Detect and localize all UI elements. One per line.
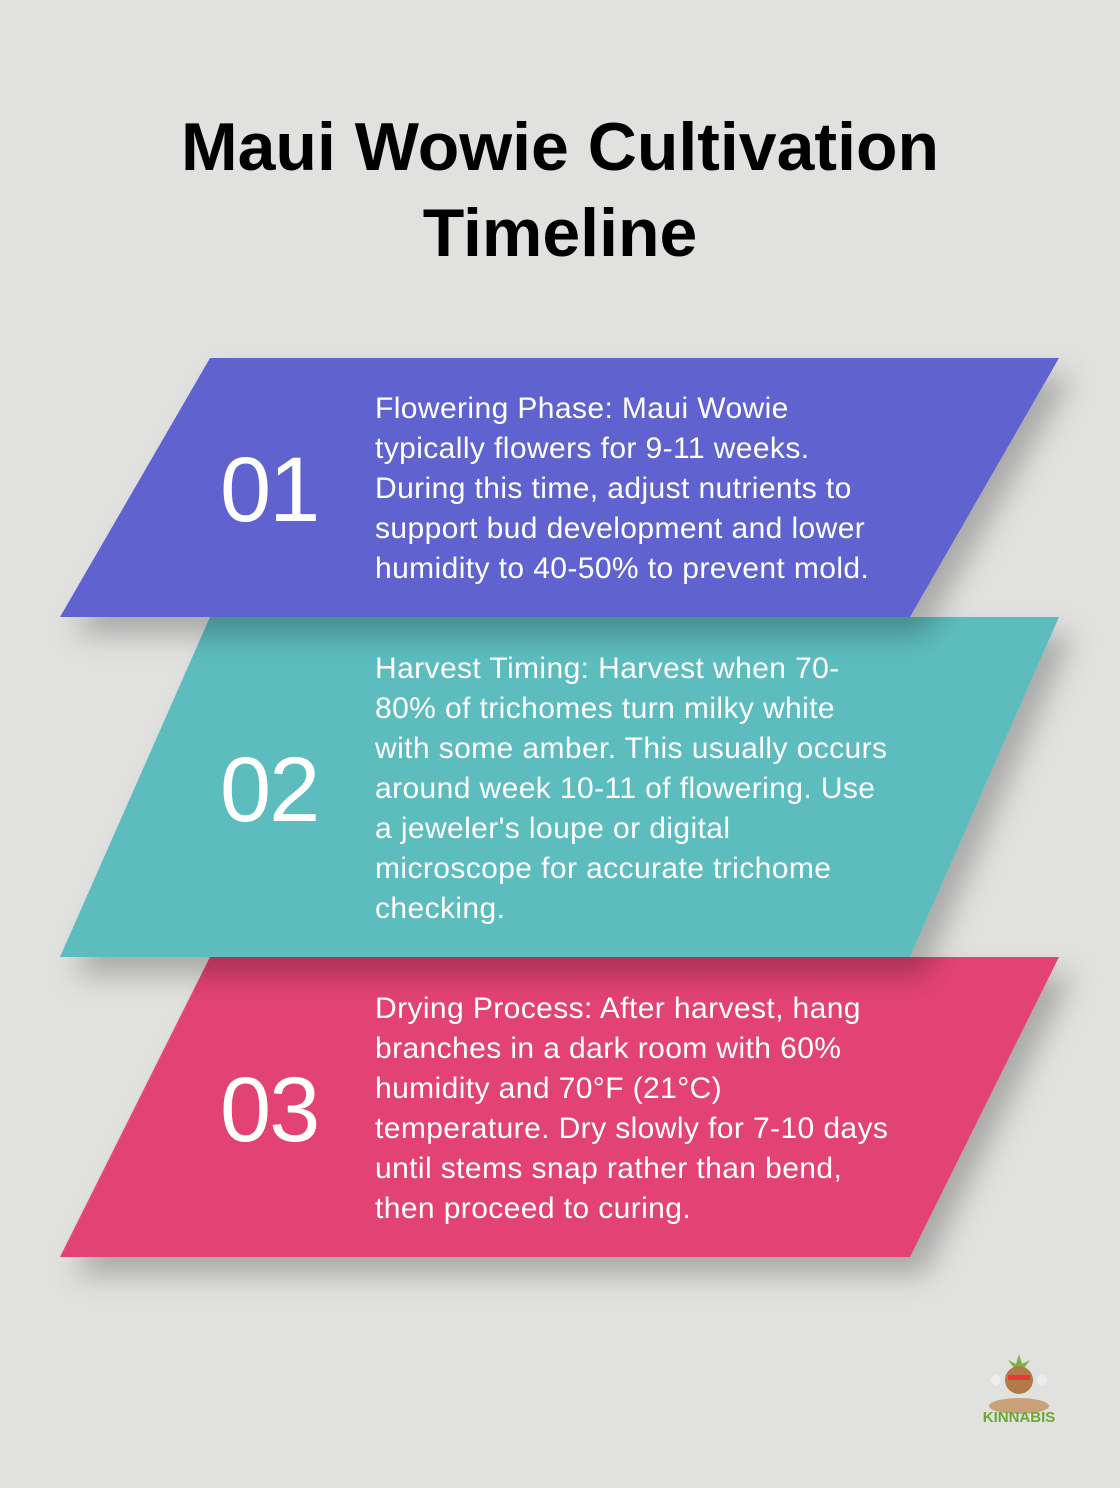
step 2 text (375, 652, 887, 925)
step 2 text: a jeweler's loupe or digital (375, 812, 730, 845)
step 2 text: 80% of trichomes turn milky white (375, 692, 835, 725)
step 1 text: During this time, adjust nutrients to (375, 472, 852, 505)
step 2 text: with some amber. This usually occurs (375, 732, 887, 765)
step 1 text: humidity to 40-50% to prevent mold. (375, 552, 869, 585)
band 2 (60, 617, 1059, 957)
logo (983, 1354, 1055, 1426)
step 1 text: support bud development and lower (375, 512, 865, 545)
step 3 text (375, 992, 888, 1225)
step 3 text: Drying Process: After harvest, hang (375, 992, 861, 1025)
band 1 (60, 358, 1059, 617)
step 2 text: around week 10-11 of flowering. Use (375, 772, 875, 805)
band 3 (60, 957, 1059, 1257)
step 1 text: typically flowers for 9-11 weeks. (375, 432, 809, 465)
step 2 number: 02 (220, 739, 318, 841)
title (181, 109, 939, 271)
step 3 number: 03 (220, 1059, 318, 1161)
step 3 text: then proceed to curing. (375, 1192, 691, 1225)
step 1 text (375, 392, 869, 585)
step 3 text: branches in a dark room with 60% (375, 1032, 841, 1065)
title: Maui Wowie Cultivation (181, 109, 939, 185)
logo: KINNABIS (983, 1409, 1055, 1426)
title: Timeline (423, 195, 697, 271)
step 1 text: Flowering Phase: Maui Wowie (375, 392, 789, 425)
step 2 text: checking. (375, 892, 505, 925)
step 2 text: Harvest Timing: Harvest when 70- (375, 652, 840, 685)
step 3 text: humidity and 70°F (21°C) (375, 1072, 722, 1105)
step 1 number: 01 (220, 439, 318, 541)
step 2 text: microscope for accurate trichome (375, 852, 831, 885)
step 3 text: until stems snap rather than bend, (375, 1152, 842, 1185)
step 3 text: temperature. Dry slowly for 7-10 days (375, 1112, 888, 1145)
